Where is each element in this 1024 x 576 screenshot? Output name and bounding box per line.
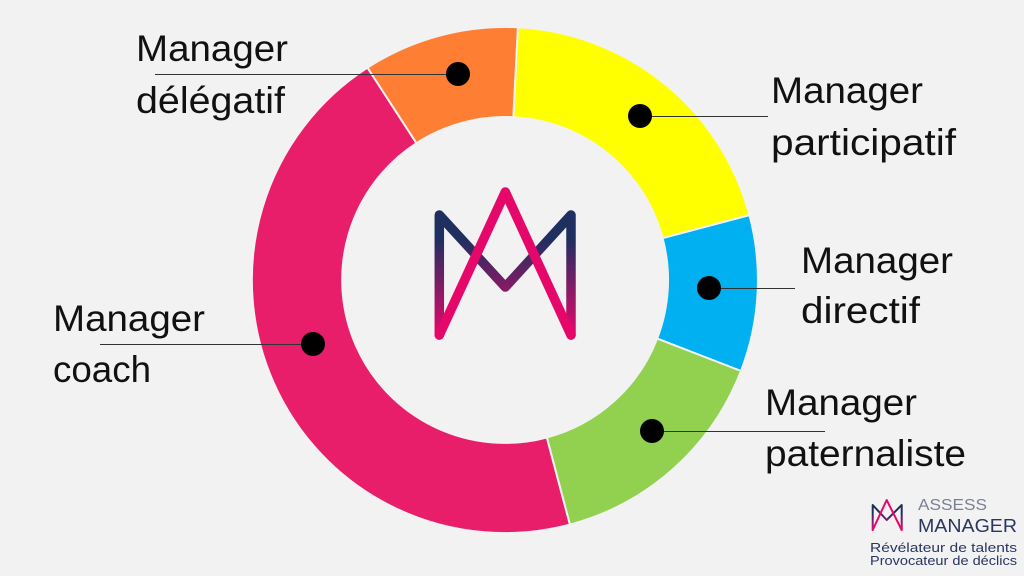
brand block: MANAGER [918, 516, 1017, 536]
label: participatif: participatif [771, 122, 957, 163]
segment: directif [657, 215, 758, 371]
label: participatif: Manager [771, 70, 923, 111]
brand block [870, 497, 1018, 568]
segment: participatif [513, 27, 750, 238]
brand block: Provocateur de déclics [870, 553, 1018, 568]
label: directif [697, 240, 953, 331]
center logo [439, 192, 571, 335]
label: délégatif: Manager [136, 28, 288, 69]
label: paternaliste [640, 382, 966, 474]
segment: coach [252, 68, 570, 533]
segment: délégatif [367, 27, 518, 143]
label: directif: Manager [801, 240, 953, 281]
label: directif: directif [801, 290, 921, 331]
donut chart [252, 27, 758, 533]
label: participatif [628, 70, 957, 163]
icon: small logo [873, 500, 902, 530]
label: délégatif: délégatif [136, 80, 286, 121]
label: paternaliste: Manager [765, 382, 917, 423]
label: coach: Manager [53, 298, 205, 339]
label: coach [53, 298, 325, 390]
tagline: Révélateur de talents [870, 540, 1018, 555]
label: délégatif [136, 28, 470, 121]
segment: paternaliste [547, 339, 741, 525]
label: coach: coach [53, 349, 151, 390]
brand name: ASSESS [918, 497, 987, 514]
label: paternaliste: paternaliste [765, 433, 966, 474]
